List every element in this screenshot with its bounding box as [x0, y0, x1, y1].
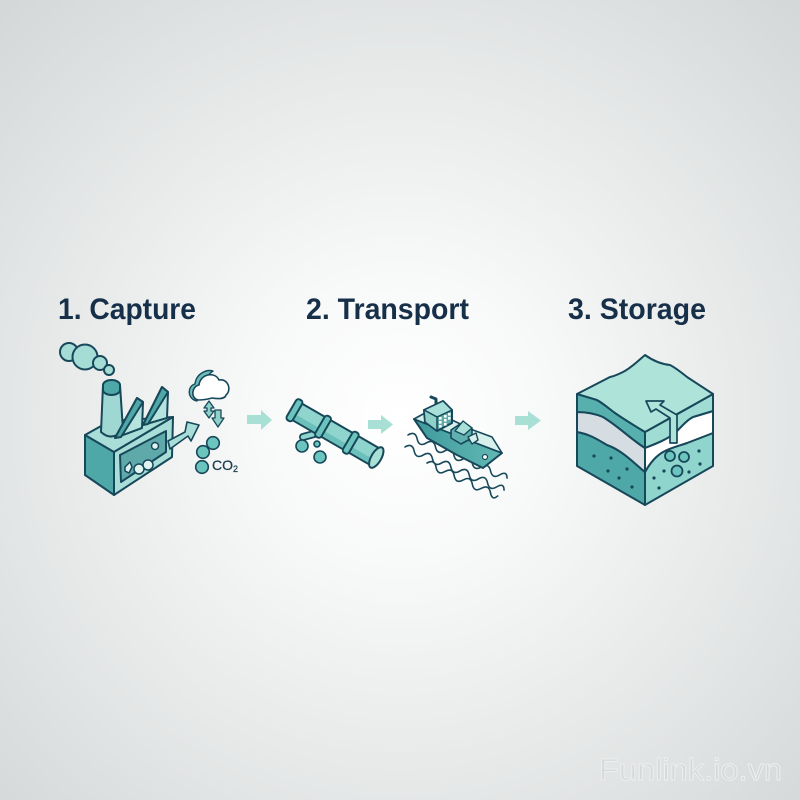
droplets — [296, 440, 326, 463]
cabin top — [424, 401, 452, 417]
funnel — [431, 397, 440, 406]
left lower layer — [577, 432, 645, 505]
first roof slope — [115, 398, 143, 438]
storage arrow — [646, 401, 677, 443]
hull — [414, 419, 502, 468]
left upper layer — [577, 394, 645, 448]
heading: 3. Storage: 3. Storage — [568, 293, 706, 326]
cabin windows — [439, 413, 451, 428]
factory left wall — [85, 435, 114, 495]
right white layer — [645, 411, 713, 472]
watermark: Funlink.io.vn — [599, 752, 782, 787]
container lid — [455, 421, 472, 435]
co2 molecules — [196, 437, 219, 473]
left grey layer — [577, 412, 645, 472]
second roof tooth — [143, 387, 168, 425]
factory top — [85, 417, 173, 452]
first roof tooth — [115, 398, 143, 438]
pipe body — [285, 398, 387, 470]
porthole — [482, 454, 488, 460]
right upper layer — [645, 394, 713, 448]
second roof slope — [143, 387, 168, 425]
heading: 2. Transport: 2. Transport — [306, 293, 469, 326]
branch pipe fill — [303, 431, 325, 437]
icon: pipeline — [285, 398, 387, 470]
output arrow — [168, 422, 199, 449]
heading: 1. Capture: 1. Capture — [58, 293, 196, 326]
icon: ship — [404, 397, 508, 499]
cloud — [193, 375, 229, 400]
arrow: pipeline to ship — [368, 415, 393, 434]
cabin — [424, 401, 452, 431]
top surface — [577, 355, 713, 432]
icon: cloud and co2 — [189, 371, 229, 473]
box — [468, 433, 478, 444]
right lower layer — [645, 433, 713, 505]
co2 bubbles — [665, 451, 689, 476]
label: CO2: 2 — [233, 464, 238, 474]
arrow: ship to storage — [515, 411, 541, 430]
chimney — [101, 385, 123, 437]
gears — [125, 442, 158, 474]
arrow: capture to transport — [247, 410, 272, 430]
rock dots — [592, 449, 702, 490]
branch pipe — [303, 431, 325, 437]
down arrow — [212, 410, 224, 427]
deck — [414, 413, 502, 453]
exchange arrows — [204, 401, 214, 418]
window panel — [120, 431, 166, 482]
container — [451, 422, 472, 444]
label: CO2: CO — [212, 457, 233, 473]
cabin side — [424, 410, 437, 431]
waves — [404, 432, 508, 499]
factory front wall — [114, 417, 173, 495]
cloud shade — [189, 371, 213, 401]
smoke puffs — [60, 343, 114, 375]
icon: geological storage block — [577, 355, 713, 505]
chimney cap — [103, 380, 120, 395]
icon: capture factory — [60, 343, 199, 495]
